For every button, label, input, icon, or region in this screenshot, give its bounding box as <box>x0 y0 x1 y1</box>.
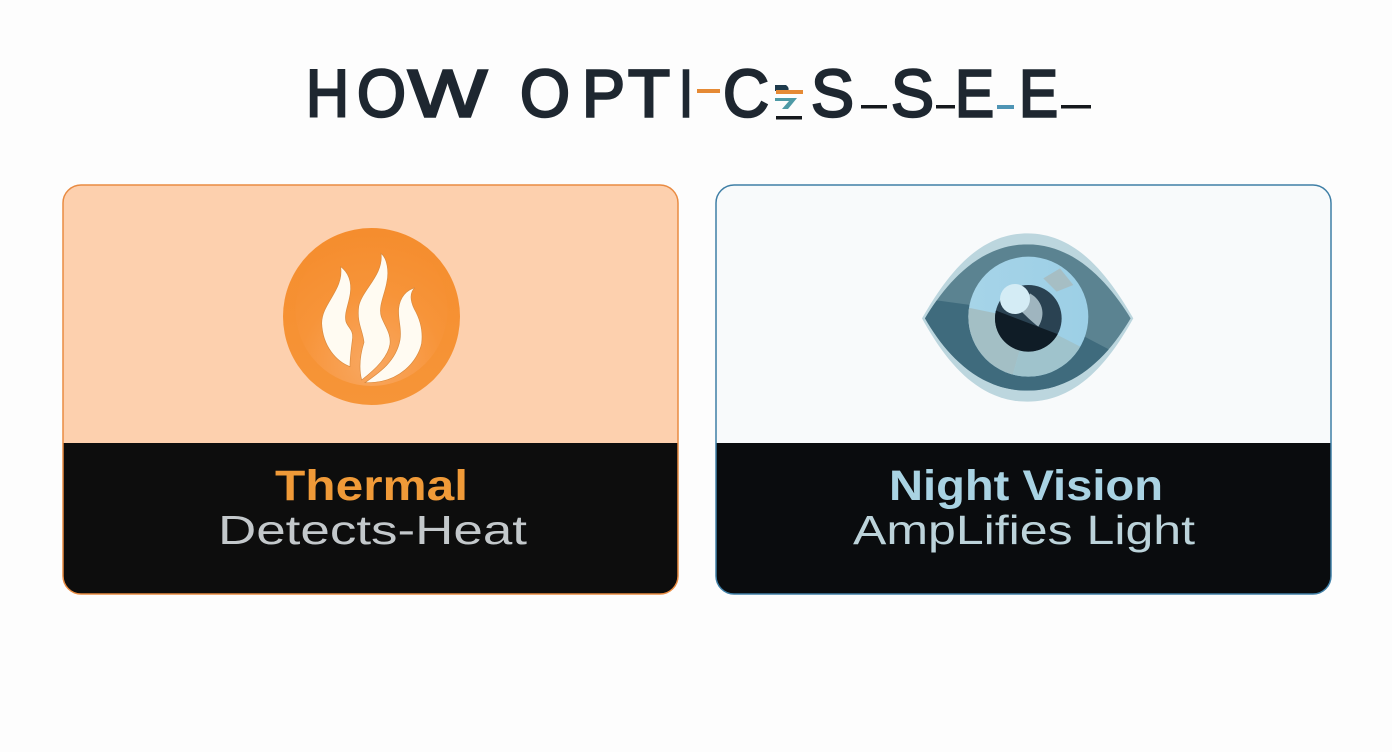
title: S <box>811 56 854 132</box>
title: S <box>891 56 934 132</box>
title: O <box>357 56 406 132</box>
title: E <box>1019 56 1058 132</box>
text: detects heat: Detects-Heat <box>218 507 528 553</box>
title <box>306 56 1091 132</box>
title: W <box>408 56 488 132</box>
title: T <box>628 56 670 132</box>
icon: eye <box>922 233 1134 402</box>
panel: night vision <box>716 185 1331 594</box>
panel: thermal <box>63 185 678 594</box>
title: H <box>306 56 349 132</box>
title: I <box>679 56 693 132</box>
title: C <box>723 56 769 132</box>
title dashes <box>697 85 1091 120</box>
heading: night vision: Night Vision <box>889 462 1163 510</box>
text: amplifies light: AmpLifies Light <box>853 507 1196 553</box>
title: O <box>520 56 570 132</box>
heading: thermal: Thermal <box>275 462 468 510</box>
icon: flames <box>283 228 460 405</box>
title: P <box>582 56 625 132</box>
title: E <box>955 56 994 132</box>
